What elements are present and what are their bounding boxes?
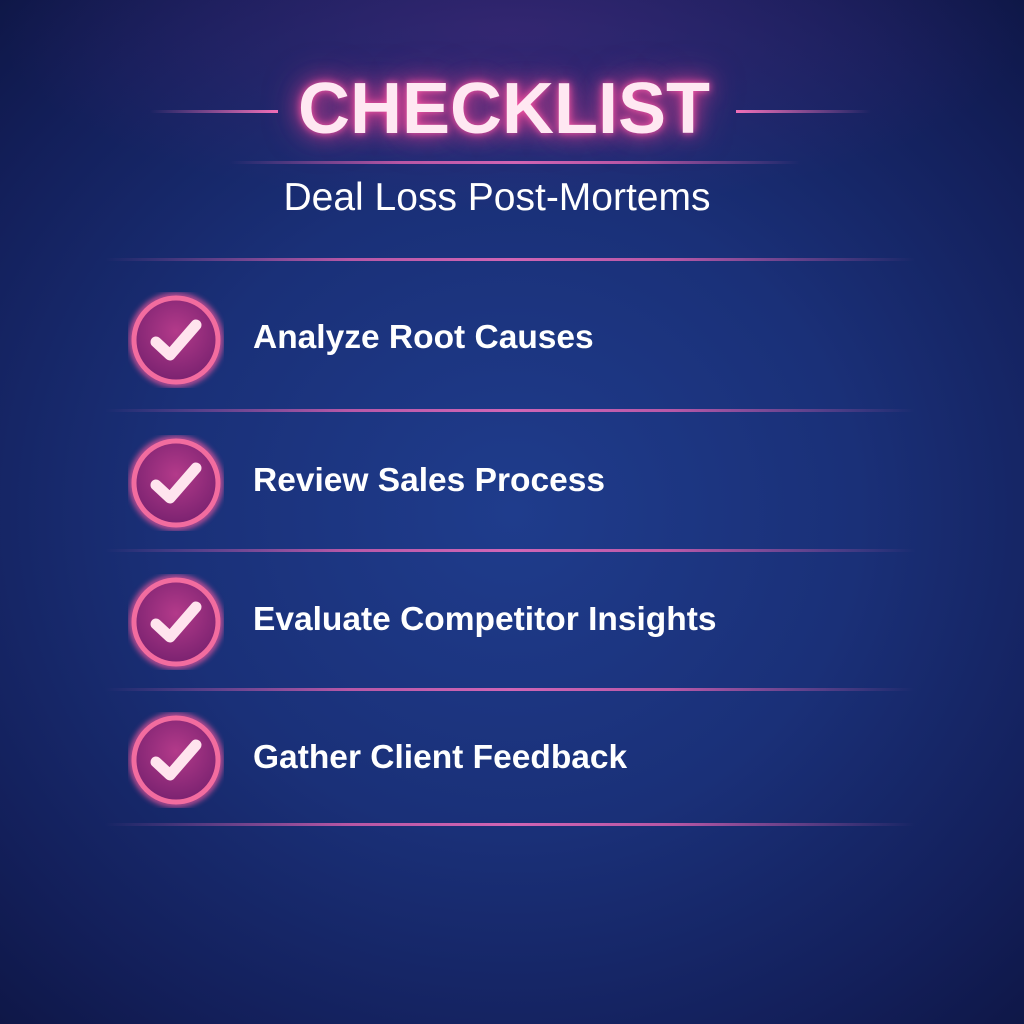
icon: check	[128, 712, 224, 808]
item 2	[128, 435, 605, 531]
item 3	[128, 574, 716, 670]
label: Evaluate Competitor Insights	[253, 601, 716, 638]
icon: check	[128, 574, 224, 670]
title: CHECKLIST	[298, 69, 710, 149]
icon: check	[128, 435, 224, 531]
item 1	[128, 292, 594, 388]
icon: check	[128, 292, 224, 388]
title decoration: left line	[150, 110, 278, 113]
item 4	[128, 712, 628, 808]
label: Review Sales Process	[253, 462, 605, 499]
subtitle: Deal Loss Post-Mortems	[284, 176, 710, 219]
label: Gather Client Feedback	[253, 739, 627, 776]
title decoration: right line	[736, 110, 871, 113]
label: Analyze Root Causes	[253, 319, 594, 356]
